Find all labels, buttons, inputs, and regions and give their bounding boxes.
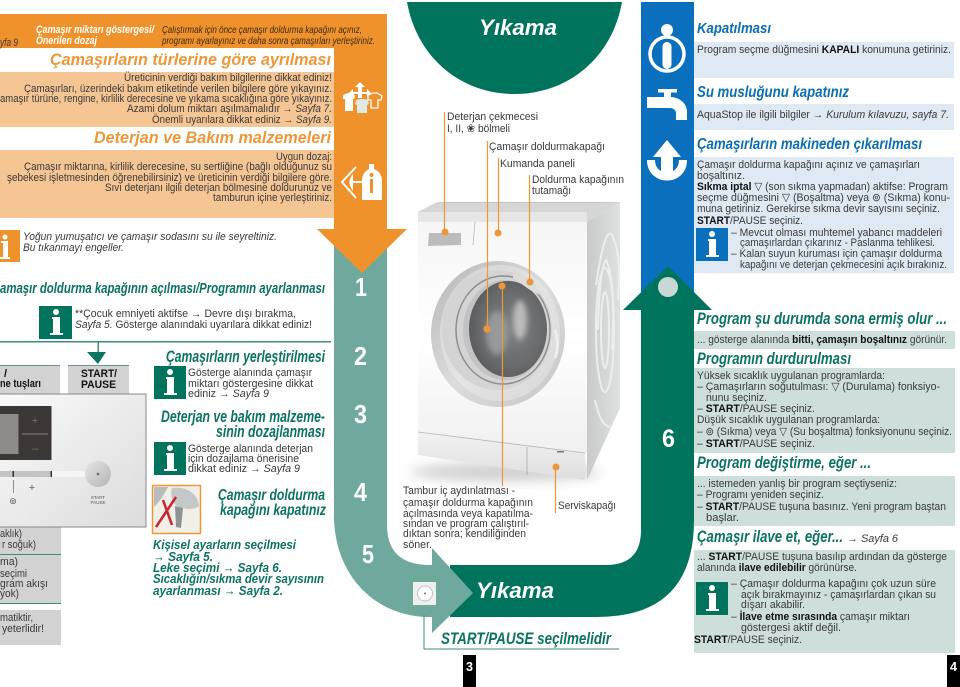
icon: info blue (696, 228, 728, 261)
icon: unload arrow (651, 140, 683, 176)
grey info boxes under panel: gram akışı (0, 578, 48, 590)
callout labels: Deterjan çekmecesi (447, 111, 538, 123)
callouts (442, 112, 560, 513)
panel: removing laundry: seçme düğmesini ▽ (Boşaltma) veya ⊚ (Sıkma) konu- (697, 192, 950, 204)
icon: water tap (647, 89, 687, 120)
panel: stopping programme: Yüksek sıcaklık uygulanan programlarda: (697, 370, 885, 382)
panel: adding laundry: göstergesi aktif değil. (741, 622, 841, 634)
control panel: + (32, 415, 38, 427)
panel: adding laundry: Çamaşır ilave et, eğer... (697, 527, 843, 546)
heading: close door (218, 487, 326, 519)
icon: info green (154, 442, 186, 475)
control panel: ⊚ (9, 496, 17, 506)
orange header bar with arrow: programı ayarlayınız ve daha sonra çamaşırları yerleştiriniz. (161, 35, 375, 47)
icon: shirts sorting (343, 82, 382, 113)
panel: removing laundry: boşaltınız. (697, 170, 745, 182)
icon: info green (154, 366, 186, 399)
panel: removing laundry: – Kalan suyun kuruması için çamaşır doldurma (731, 248, 943, 260)
panel: adding laundry: – Çamaşır doldurma kapağını çok uzun süre (731, 578, 936, 590)
grey info boxes under panel: ma) (0, 556, 18, 568)
teal flow arrow: 3 (354, 399, 367, 429)
section heading: door and programme: amaşır doldurma kapağının açılması/Programın ayarlanması (0, 280, 325, 297)
icon: eye and bottle (342, 164, 382, 200)
panel: adding laundry: ... START/PAUSE tuşuna basılıp ardından da gösterge (697, 551, 947, 563)
personal settings: ayarlanması → Sayfa 2. (153, 583, 283, 598)
panel: detergent: Deterjan ve Bakım malzemeleri (94, 129, 331, 147)
panel: removing laundry: muna getiriniz. Gerekirse sıkma devir sayısını seçiniz. (697, 203, 940, 215)
panel: detergent: tamburun içine yerleştiriniz. (213, 192, 332, 204)
washing machine (410, 202, 620, 481)
panel: laundry sorting: Azami dolum miktarı aşılmamalıdır → Sayfa 7. (127, 103, 332, 115)
caption: START/PAUSE: START/PAUSE seçilmelidir (441, 629, 612, 648)
grey info boxes under panel: yeterlidir! (2, 623, 44, 635)
panel: switching off: Kapatılması (697, 20, 771, 37)
block: laundry loading: Gösterge alanında çamaşır (188, 367, 312, 379)
label boxes (0, 365, 129, 394)
panel: removing laundry: Sıkma iptal ▽ (son sıkma yapmadan) aktifse: Program (697, 181, 948, 193)
note: child lock (39, 306, 312, 339)
panel: changing programme: – START/PAUSE tuşuna basınız. Yeni program baştan (697, 501, 946, 513)
panel: laundry sorting: amaşır türüne, rengine, kirlilik derecesine ve yıkama sıcaklığına göre yıkayınız. (0, 93, 332, 105)
icon: info green (39, 306, 72, 339)
callout labels: Serviskapağı (558, 500, 616, 512)
panel: laundry sorting: Üreticinin verdiği bakım bilgilerine dikkat ediniz! (124, 72, 332, 84)
bottom Yıkama label: Yıkama (476, 578, 554, 603)
orange header bar with arrow: Önerilen dozaj (36, 34, 98, 47)
grey info boxes under panel: seçimi (0, 568, 27, 580)
label boxes: PAUSE (81, 379, 116, 391)
orange header bar with arrow: Çamaşır miktarı göstergesi/ (36, 24, 156, 36)
note: softener: Bu tıkanmayı engeller. (23, 242, 124, 254)
panel: adding laundry: START/PAUSE seçiniz. (694, 634, 802, 646)
callout labels (403, 111, 624, 551)
panel: laundry sorting (0, 51, 334, 127)
grey info boxes under panel: matiktir, (0, 612, 33, 624)
callout labels: Çamaşır doldurmakapağı (489, 141, 605, 153)
panel: changing programme: ... istemeden yanlış bir program seçtiyseniz: (697, 478, 897, 490)
block: laundry loading: Çamaşırların yerleştirilmesi (166, 347, 326, 366)
panel: stopping programme: Programın durdurulması (697, 349, 851, 368)
orange header bar with arrow (0, 14, 407, 273)
panel: stopping programme (694, 349, 955, 453)
icon: info green (696, 582, 728, 615)
icon: power info (650, 24, 684, 71)
panel: removing laundry: Çamaşır doldurma kapağını açınız ve çamaşırları (697, 159, 920, 171)
panel: removing laundry: çamaşırlardan çıkarınız - Paslanma tehlikesi. (740, 237, 935, 249)
panel: laundry sorting: Çamaşırları, üzerindeki bakım etiketinde verilen bilgilere göre yıkayınız. (24, 83, 332, 95)
panel: changing programme: başlar. (706, 512, 739, 524)
note: child lock: **Çocuk emniyeti aktifse → Devre dışı bırakma, (75, 308, 296, 320)
panel: detergent: Uygun dozaj: (276, 151, 332, 163)
green half circle header (407, 2, 622, 94)
panel: adding laundry: – İlave etme sırasında çamaşır miktarı (731, 610, 910, 623)
teal flow arrow: 5 (362, 539, 374, 569)
label boxes: / (4, 368, 7, 380)
personal settings: Kişisel ayarların seçilmesi (153, 537, 296, 552)
callout labels: dıktan sonra; kendiliğinden (403, 528, 526, 540)
heading: close door: kapağını kapatınız (220, 502, 326, 519)
panel: detergent: Sıvı deterjanı ilgili deterjan bölmesine doldurunuz ve (105, 182, 332, 194)
panel: switching off: Program seçme düğmesini KAPALI konumuna getiriniz. (697, 44, 951, 56)
panel: removing laundry (694, 136, 954, 273)
note: softener (0, 230, 277, 262)
personal settings (153, 537, 324, 598)
panel: switching off (694, 20, 954, 78)
personal settings: → Sayfa 5. (153, 549, 213, 564)
block: detergent dosing: Gösterge alanında deterjan (188, 443, 313, 455)
personal settings: Sıcaklığın/sıkma devir sayısının (153, 571, 324, 586)
callout labels: söner. (403, 539, 432, 551)
panel: water tap (694, 84, 954, 130)
panel: adding laundry (694, 527, 955, 653)
icon: start button thumbnail (413, 582, 436, 605)
green half circle header: Yıkama (479, 15, 557, 40)
note: child lock: Sayfa 5. Gösterge alanındaki uyarılara dikkat ediniz! (75, 319, 312, 331)
divider with arrow (0, 341, 331, 364)
block: laundry loading: miktarı göstergesine dikkat (188, 378, 313, 390)
panel: changing programme (694, 453, 955, 526)
block: laundry loading: ediniz → Sayfa 9 (188, 388, 269, 400)
panel: stopping programme: Düşük sıcaklık uygulanan programlarda: (697, 414, 880, 426)
callout labels: Tambur iç aydınlatması - (403, 485, 515, 497)
control panel: START (91, 495, 105, 500)
panel: programme finished: ... gösterge alanında bitti, çamaşırı boşaltınız görünür. (697, 334, 947, 346)
control panel: – (32, 443, 39, 455)
panel: stopping programme: – START/PAUSE seçiniz. (697, 438, 815, 450)
panel: laundry sorting: Çamaşırların türlerine göre ayrılması (50, 51, 331, 69)
orange header bar with arrow: yfa 9 (0, 37, 18, 49)
panel: laundry sorting: Önemli uyarılara dikkat ediniz → Sayfa 9. (152, 114, 332, 126)
grey info boxes under panel: yok) (0, 588, 19, 600)
block: detergent dosing: için dozajlama önerisine (188, 453, 299, 465)
panel: stopping programme: nunu seçiniz. (706, 392, 767, 404)
panel: stopping programme: – START/PAUSE seçiniz. (697, 403, 815, 415)
callout labels: sından ve program çalıştırıl- (403, 518, 529, 530)
detergent drawer (428, 233, 461, 246)
note: softener: Yoğun yumuşatıcı ve çamaşır sodasını su ile seyreltiniz. (23, 231, 277, 243)
grey info boxes under panel: r soğuk) (2, 539, 36, 551)
page number 3 (463, 655, 476, 687)
thumbnail: door do not jam (152, 486, 200, 534)
callout labels: Doldurma kapağının (532, 174, 624, 186)
block: detergent dosing: dikkat ediniz → Sayfa 9 (188, 463, 300, 475)
control panel: PAUSE (91, 500, 105, 505)
green flow arrow (450, 266, 712, 617)
callout labels: Kumanda paneli (500, 158, 575, 170)
control panel: + (29, 482, 35, 494)
page number 4 (947, 655, 960, 687)
panel: adding laundry: alanında ilave edilebilir görünürse. (697, 562, 857, 574)
panel: detergent: Çamaşır miktarına, kirlilik derecesine, su sertliğine (bağlı olduğunuz su (24, 161, 332, 173)
callout labels: I, II, ❀ bölmeli (447, 123, 510, 135)
block: detergent dosing (154, 407, 325, 475)
teal flow arrow: 4 (354, 477, 367, 507)
panel: changing programme: – Programı yeniden seçiniz. (697, 489, 824, 501)
block: detergent dosing: Deterjan ve bakım malzeme- (161, 407, 325, 426)
panel: programme finished (694, 309, 955, 349)
caption: START/PAUSE (424, 615, 619, 649)
callout labels: çamaşır doldurma kapağının (403, 497, 533, 509)
panel: water tap: AquaStop ile ilgili bilgiler → Kurulum kılavuzu, sayfa 7. (697, 109, 949, 121)
teal flow arrow: 1 (355, 272, 367, 302)
block: detergent dosing: sinin dozajlanması (216, 422, 325, 441)
control panel (0, 394, 146, 527)
panel: detergent: şebekesi işletmesinden öğrenebilirsiniz) ve üreticinin verdiği bilgilere göre. (7, 172, 332, 184)
personal settings: Leke seçimi → Sayfa 6. (153, 560, 282, 575)
page number 4: 4 (950, 659, 958, 674)
panel: adding laundry: → Sayfa 6 (847, 533, 899, 545)
panel: removing laundry: – Mevcut olması muhtemel yabancı maddeleri (731, 227, 942, 239)
block: laundry loading (154, 347, 326, 400)
panel: adding laundry: açık bırakmayınız - çamaşırlardan çıkan su (741, 589, 936, 601)
panel: detergent (0, 129, 334, 218)
page number 3: 3 (466, 659, 473, 674)
green flow arrow: 6 (662, 425, 675, 453)
callout labels: tutamağı (532, 185, 571, 197)
heading: close door: Çamaşır doldurma (218, 487, 325, 504)
panel: removing laundry: START/PAUSE seçiniz. (697, 215, 803, 227)
teal flow arrow: 2 (354, 341, 367, 371)
door (431, 261, 565, 407)
panel: water tap: Su musluğunu kapatınız (697, 84, 849, 101)
grey info boxes under panel (0, 527, 61, 645)
grey info boxes under panel: aklık) (0, 528, 22, 540)
panel: changing programme: Program değiştirme, eğer ... (697, 453, 871, 472)
callout labels: açılmasında veya kapatılma- (403, 508, 533, 520)
side ripples (595, 234, 619, 427)
icon: info orange (0, 230, 20, 262)
blue column (641, 2, 694, 292)
label boxes: START/ (81, 368, 117, 380)
label boxes: ne tuşları (0, 378, 41, 390)
panel: adding laundry: dışarı akabilir. (741, 599, 805, 611)
teal flow arrow (334, 230, 473, 633)
orange header bar with arrow: Çalıştırmak için önce çamaşır doldurma kapağını açınız, (162, 24, 362, 36)
panel: stopping programme: – Çamaşırların soğutulması: ▽ (Durulama) fonksiyo- (697, 381, 940, 393)
